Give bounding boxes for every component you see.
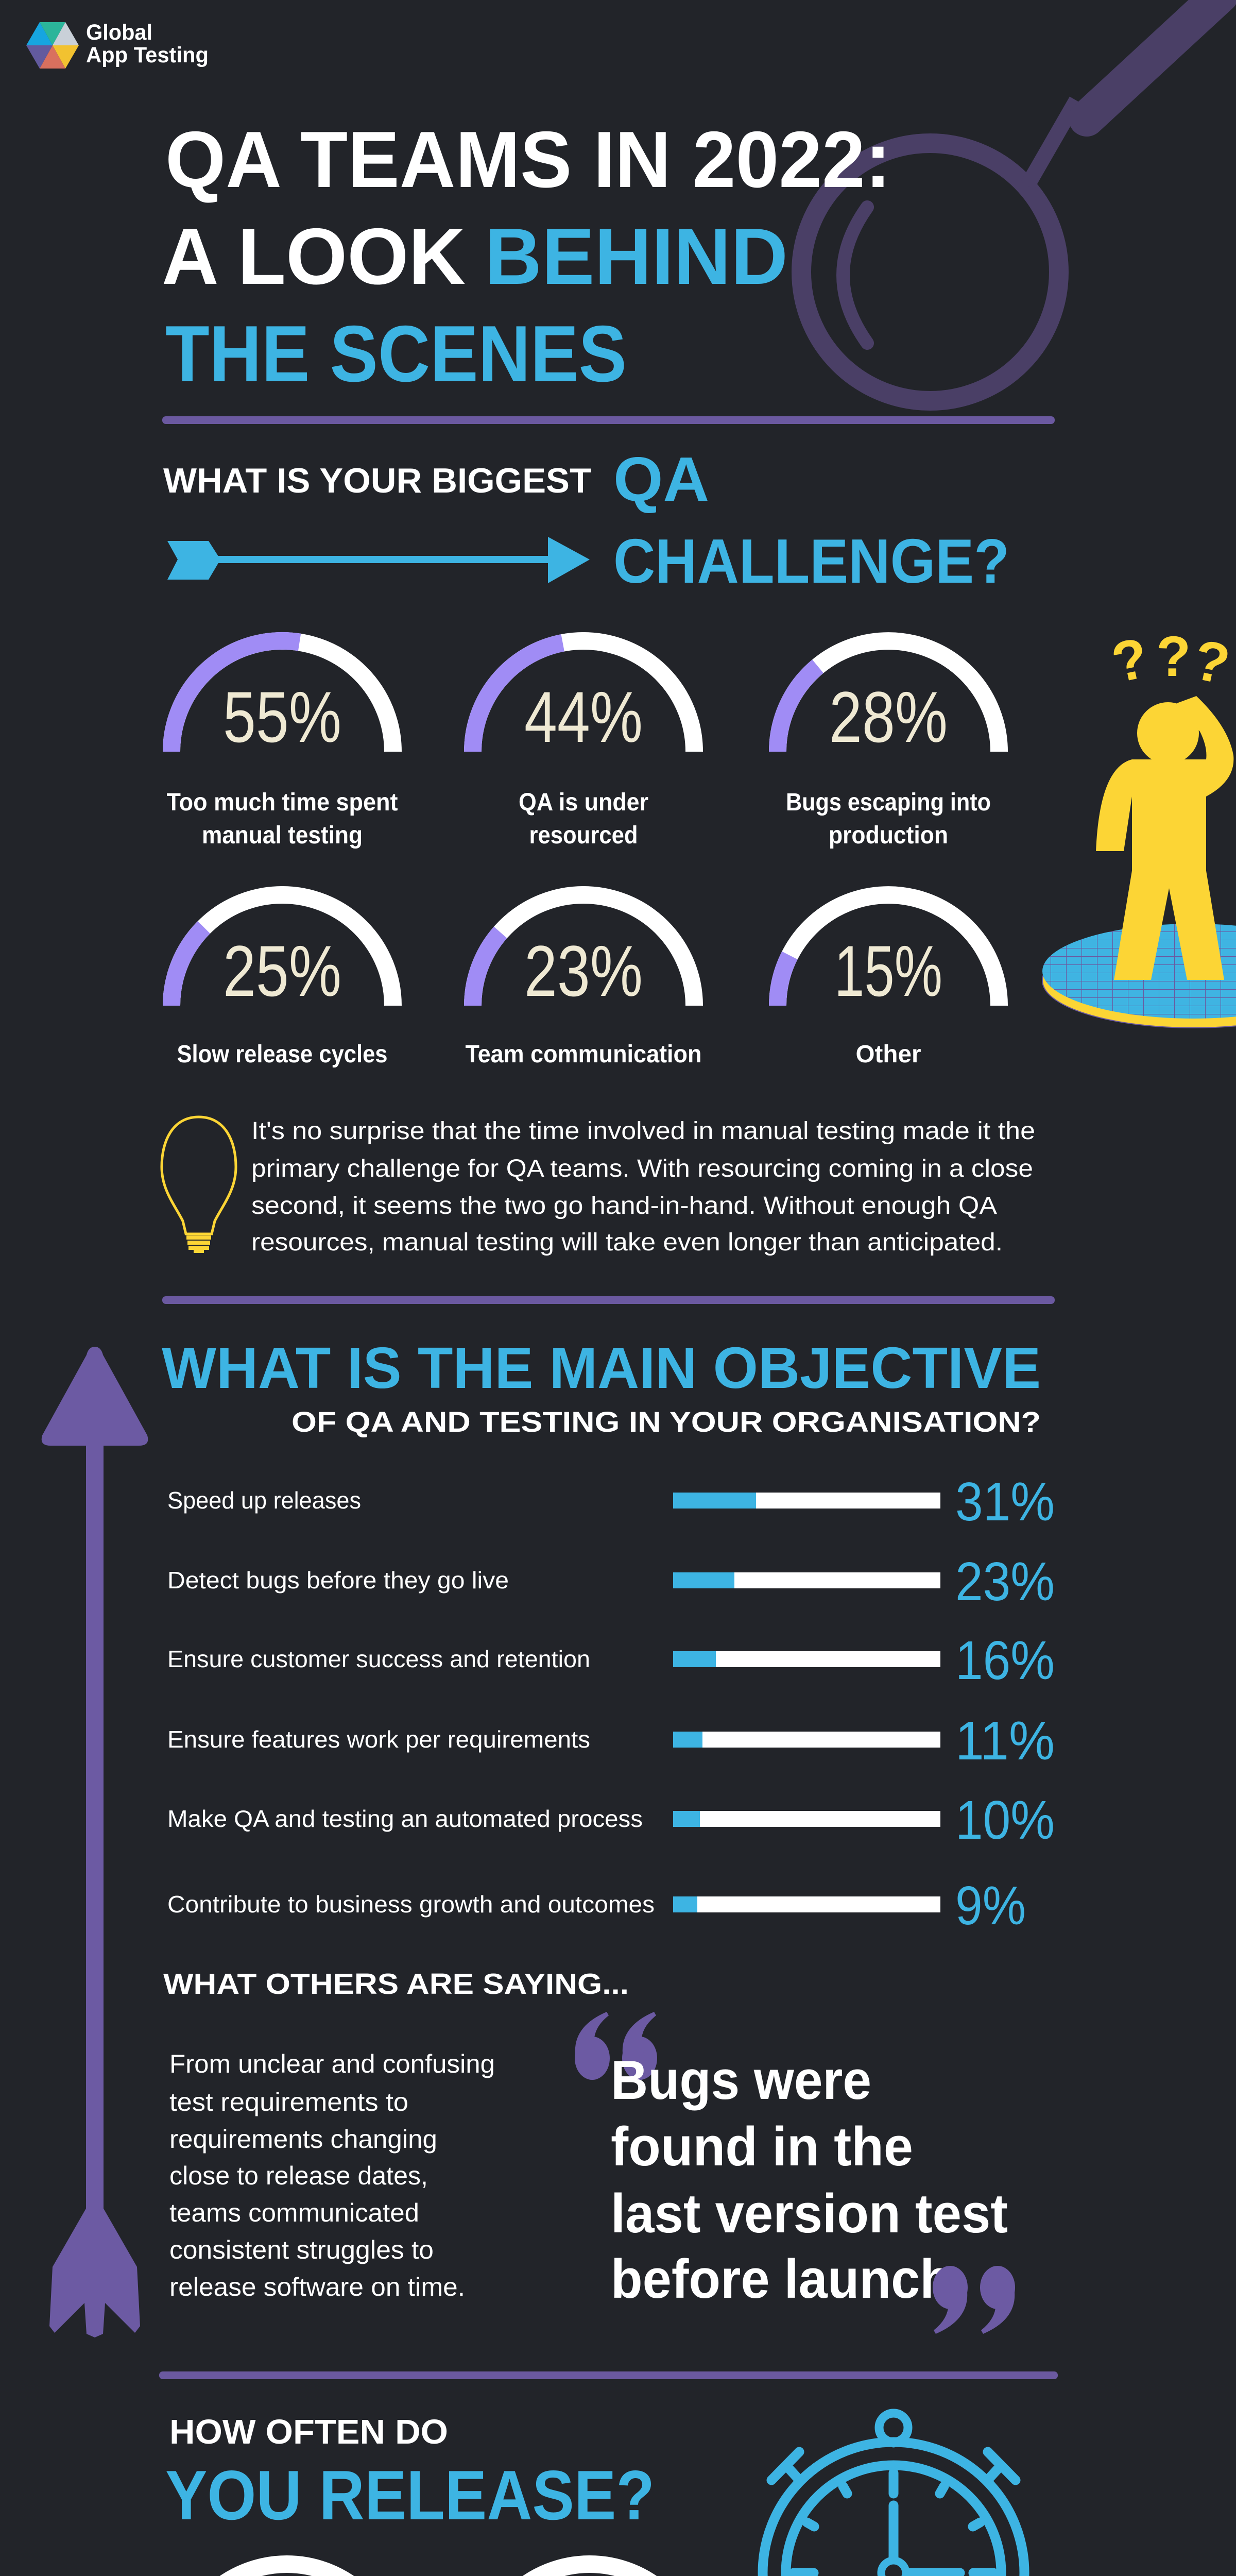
bar chart: objectives: 9% [955, 1875, 1026, 1936]
gauge labels: Bugs escaping into [786, 789, 991, 816]
gauge values [223, 676, 948, 1011]
callout: quote: last version test [611, 2182, 1008, 2244]
text: struggles summary: teams communicated [169, 2198, 419, 2227]
icon: close quote [933, 2266, 1015, 2334]
text: struggles summary: close to release dates, [169, 2161, 428, 2190]
gauges: release frequency [176, 2564, 1004, 2576]
bar chart: objectives: Detect bugs before they go live [167, 1567, 509, 1594]
bar chart: objectives: 16% [955, 1630, 1055, 1691]
text: struggles summary: From unclear and confusing [169, 2049, 495, 2078]
bar chart: objectives [167, 1471, 1055, 1936]
gauge labels: production [829, 822, 948, 849]
gauge values: 55% [223, 676, 341, 757]
heading: how often do you release: YOU RELEASE? [165, 2456, 655, 2534]
title: A LOOK [162, 212, 466, 301]
text: manual testing insight [251, 1117, 1035, 1256]
callout: quote: found in the [611, 2115, 913, 2177]
gauge labels: resourced [529, 822, 638, 849]
title: BEHIND [485, 212, 788, 301]
bar chart: objectives: Speed up releases [167, 1487, 361, 1514]
gauge labels: Team communication [466, 1041, 701, 1068]
icon: light bulb [162, 1117, 236, 1251]
gauge values: 44% [524, 676, 643, 757]
text: struggles summary: consistent struggles to [169, 2235, 434, 2264]
logo: App Testing [86, 43, 209, 67]
gauge labels: Too much time spent [167, 789, 398, 816]
bar chart: objectives: 11% [955, 1710, 1055, 1771]
bar chart: objectives: 10% [955, 1790, 1055, 1851]
bar chart: objectives: Make QA and testing an automated process [167, 1805, 643, 1832]
icon: confused person: ? [1106, 626, 1154, 695]
text: struggles summary: release software on time. [169, 2273, 465, 2301]
bar chart: objectives: 31% [955, 1471, 1055, 1532]
title: QA TEAMS IN 2022: [165, 115, 891, 204]
heading: biggest QA challenge [163, 444, 1009, 596]
title [162, 115, 891, 398]
callout: quote: Bugs were [611, 2049, 871, 2111]
heading: main objective: OF QA AND TESTING IN YOUR ORGANISATION? [291, 1405, 1041, 1438]
text: manual testing insight: primary challenge for QA teams. With resourcing coming in a close [251, 1155, 1033, 1182]
text: struggles summary [169, 2049, 495, 2301]
callout: quote: before launch. [611, 2248, 966, 2310]
gauges: QA challenges [171, 641, 999, 1006]
icon: confused person [1042, 625, 1236, 1028]
icon: open quote [575, 2012, 657, 2080]
heading: biggest QA challenge: WHAT IS YOUR BIGGEST [163, 461, 591, 500]
heading: main objective: WHAT IS THE MAIN OBJECTIVE [162, 1335, 1041, 1400]
gauge labels [167, 789, 991, 1068]
bar chart: objectives: Ensure features work per requirements [167, 1726, 590, 1753]
heading: main objective [162, 1335, 1041, 1438]
gauge labels: manual testing [202, 822, 363, 849]
text: manual testing insight: second, it seems the two go hand-in-hand. Without enough QA [251, 1192, 997, 1219]
arrow: vertical purple [42, 1347, 148, 2337]
logo: Global [86, 20, 152, 45]
text: manual testing insight: It's no surprise that the time involved in manual testing made it the [251, 1117, 1035, 1145]
heading: biggest QA challenge: QA [613, 444, 709, 514]
arrow: right [167, 537, 590, 583]
gauge labels: QA is under [519, 789, 648, 816]
icon: stopwatch [763, 2413, 1024, 2576]
text: manual testing insight: resources, manual testing will take even longer than anticipated. [251, 1229, 1003, 1256]
gauge labels: Other [856, 1041, 921, 1068]
text: struggles summary: test requirements to [169, 2088, 408, 2116]
icon: magnifying glass [801, 0, 1221, 401]
heading: what others are saying: WHAT OTHERS ARE SAYING... [163, 1968, 629, 2001]
gauge labels: Slow release cycles [177, 1041, 387, 1068]
gauge values: 25% [223, 930, 341, 1011]
bar chart: objectives: Contribute to business growth and outcomes [167, 1891, 655, 1918]
text: struggles summary: requirements changing [169, 2125, 437, 2154]
gauge values: 23% [524, 930, 643, 1011]
icon: confused person: ? [1188, 628, 1235, 697]
gauge values: 15% [834, 930, 942, 1011]
bar chart: objectives: 23% [955, 1551, 1055, 1612]
heading: how often do you release [165, 2413, 655, 2534]
icon: confused person: ? [1156, 625, 1191, 688]
title: THE SCENES [165, 309, 627, 398]
gauge values: 28% [829, 676, 948, 757]
bar chart: objectives: Ensure customer success and retention [167, 1646, 590, 1672]
callout: quote [611, 2049, 1008, 2310]
heading: biggest QA challenge: CHALLENGE? [613, 526, 1009, 596]
logo [26, 20, 209, 69]
heading: how often do you release: HOW OFTEN DO [169, 2413, 448, 2451]
